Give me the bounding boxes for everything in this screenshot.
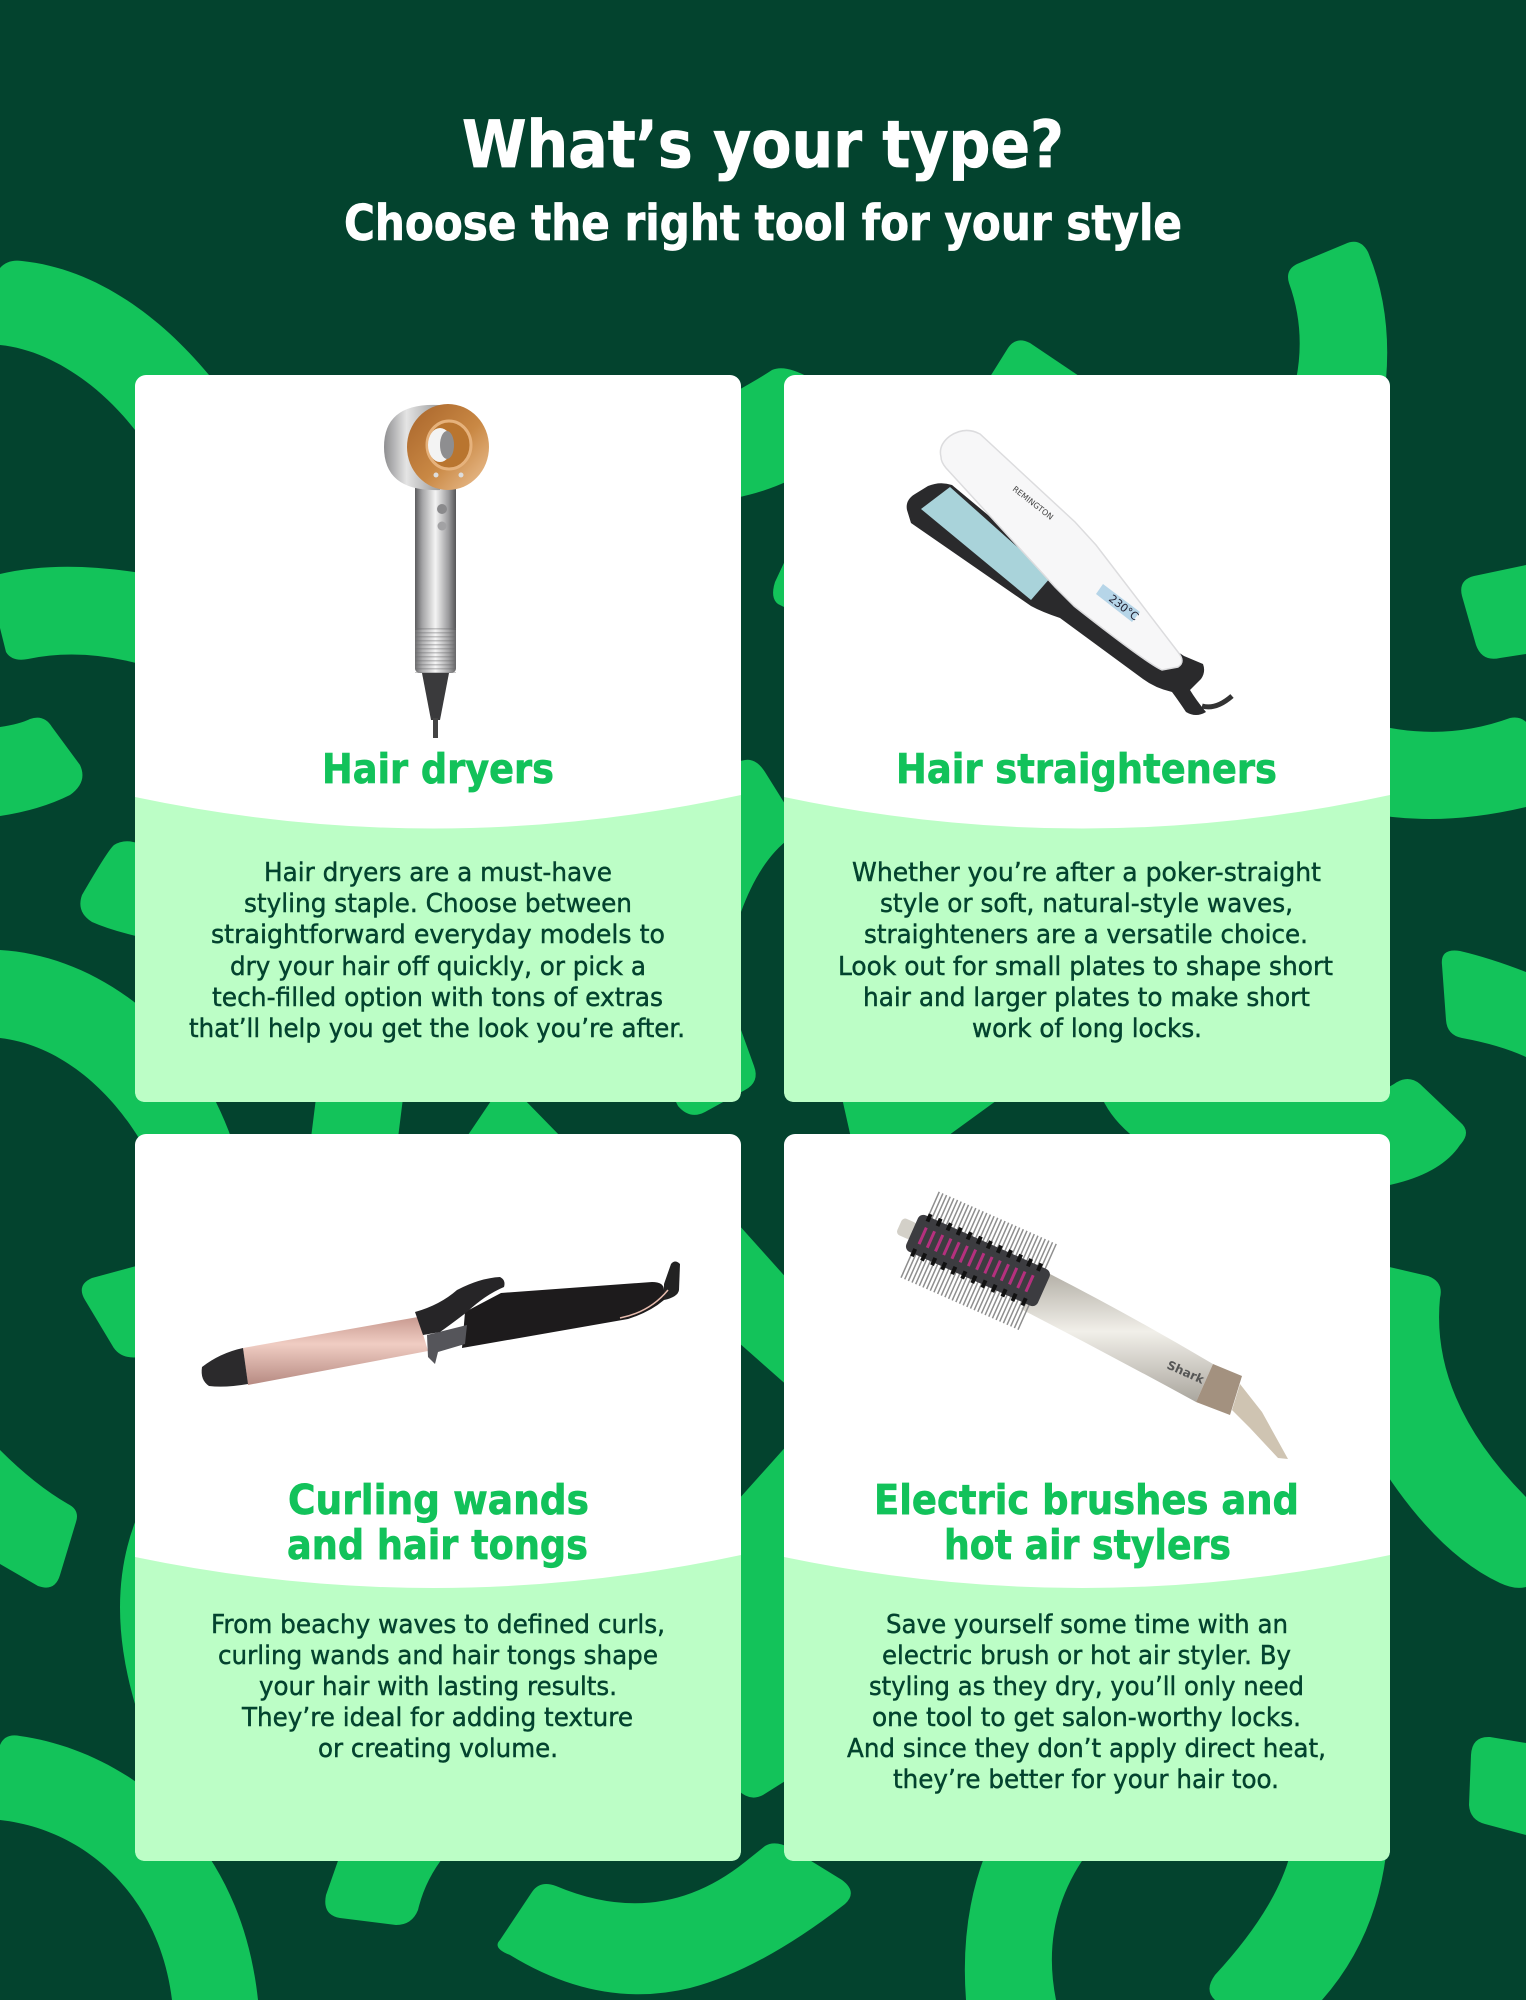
text block: electric brushes and hot air stylers: And since they don’t apply direct heat, xyxy=(847,1734,1326,1764)
heading: electric brushes and hot air stylers xyxy=(874,1476,1299,1569)
panel: curling wands and hair tongs xyxy=(135,1134,741,1861)
text block: hair dryers: dry your hair off quickly, or pick a xyxy=(230,952,646,982)
icon: hair straightener xyxy=(907,430,1232,715)
text block: hair dryers: straightforward everyday models to xyxy=(211,920,665,950)
text block: electric brushes and hot air stylers: styling as they dry, you’ll only need xyxy=(869,1672,1304,1702)
subtitle: Choose the right tool for your style xyxy=(344,195,1182,252)
heading: electric brushes and hot air stylers: hot air stylers xyxy=(944,1521,1231,1569)
text block: curling wands and hair tongs: your hair with lasting results. xyxy=(259,1672,617,1702)
icon: hair dryer xyxy=(384,404,489,738)
icon: hair straightener: 230°C xyxy=(1106,592,1141,624)
text block: curling wands and hair tongs: From beachy waves to defined curls, xyxy=(211,1610,665,1640)
icon: curling wand xyxy=(202,1262,680,1387)
heading: hair dryers: Hair dryers xyxy=(322,745,554,793)
text block: curling wands and hair tongs: or creating volume. xyxy=(318,1734,558,1764)
text block: hair straighteners: straighteners are a versatile choice. xyxy=(864,920,1308,950)
text block: hair dryers: tech-filled option with tons of extras xyxy=(212,983,663,1013)
panel: electric brushes and hot air stylers xyxy=(784,1134,1390,1861)
text block: hair straighteners xyxy=(838,858,1333,1044)
heading: curling wands and hair tongs xyxy=(287,1476,589,1569)
text block: hair dryers xyxy=(189,858,685,1044)
text block: hair straighteners: Whether you’re after a poker-straight xyxy=(852,858,1321,888)
text block: hair straighteners: work of long locks. xyxy=(972,1014,1202,1044)
icon: hot air brush: Shark xyxy=(1165,1358,1207,1387)
text block: hair dryers: styling staple. Choose between xyxy=(244,889,632,919)
icon: hot air brush xyxy=(886,1195,1288,1459)
text block: hair straighteners: Look out for small plates to shape short xyxy=(838,952,1333,982)
heading: curling wands and hair tongs: Curling wands xyxy=(288,1476,589,1524)
panel: hair straighteners xyxy=(784,375,1390,1102)
heading: electric brushes and hot air stylers: Electric brushes and xyxy=(874,1476,1299,1524)
text block: electric brushes and hot air stylers xyxy=(847,1610,1326,1795)
text block: curling wands and hair tongs: They’re ideal for adding texture xyxy=(241,1703,633,1733)
text block: hair straighteners: hair and larger plates to make short xyxy=(863,983,1310,1013)
heading: curling wands and hair tongs: and hair tongs xyxy=(287,1521,588,1569)
text block: hair straighteners: style or soft, natural-style waves, xyxy=(880,889,1293,919)
heading: hair straighteners: Hair straighteners xyxy=(896,745,1277,793)
panel: hair dryers xyxy=(135,375,741,1102)
text block: electric brushes and hot air stylers: one tool to get salon-worthy locks. xyxy=(872,1703,1301,1733)
text block: electric brushes and hot air stylers: electric brush or hot air styler. By xyxy=(882,1641,1291,1671)
icon: hair straightener: REMINGTON xyxy=(1011,484,1055,522)
text block: electric brushes and hot air stylers: Save yourself some time with an xyxy=(886,1610,1288,1640)
text block: curling wands and hair tongs xyxy=(211,1610,665,1764)
text block: electric brushes and hot air stylers: they’re better for your hair too. xyxy=(893,1765,1279,1795)
text block: hair dryers: Hair dryers are a must-have xyxy=(264,858,612,888)
text block: hair dryers: that’ll help you get the look you’re after. xyxy=(189,1014,685,1044)
text block: curling wands and hair tongs: curling wands and hair tongs shape xyxy=(218,1641,658,1671)
title: What’s your type? xyxy=(462,108,1064,183)
